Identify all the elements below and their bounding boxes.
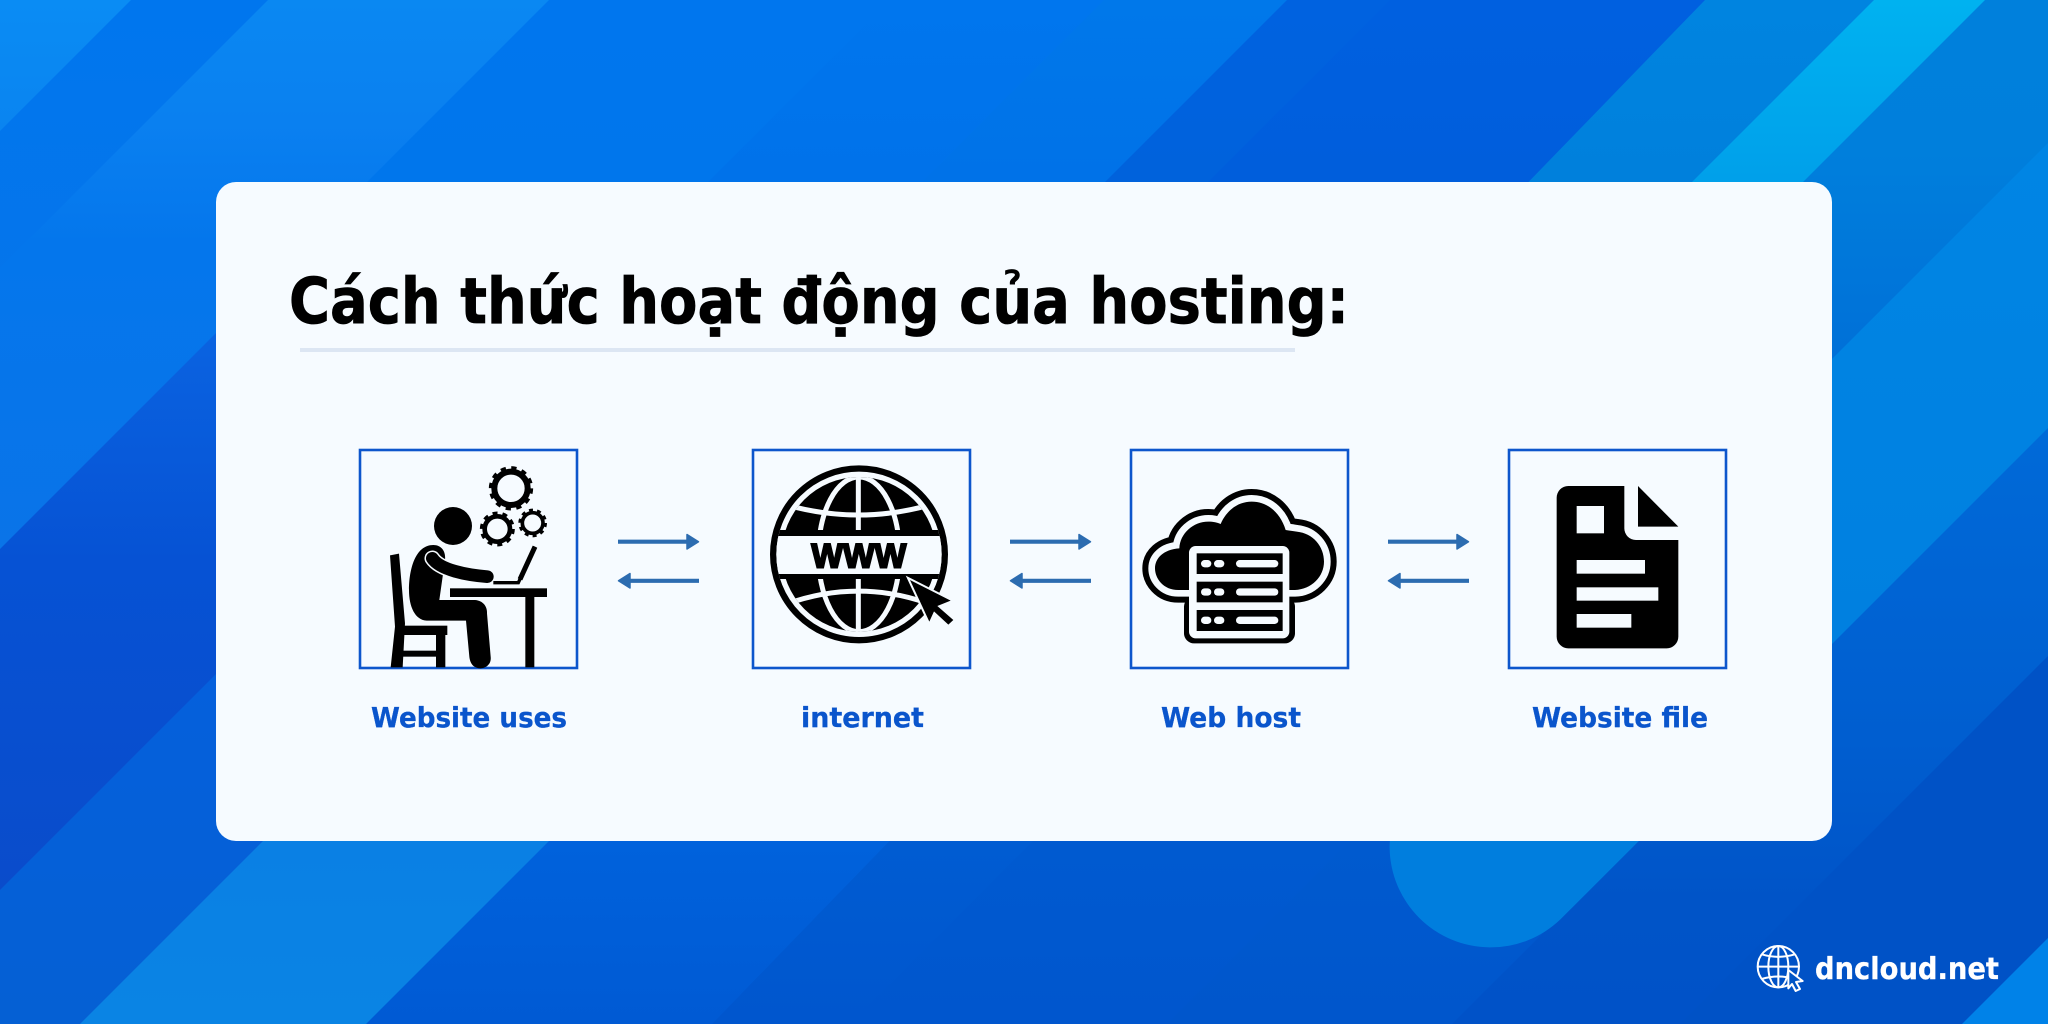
title: Cách thức hoạt động của hosting: xyxy=(289,265,1349,338)
step 3: web host xyxy=(1131,450,1348,734)
arrows 2 xyxy=(1010,534,1091,588)
box 3 xyxy=(1131,450,1348,668)
icon: www globe with cursor xyxy=(773,468,953,640)
arrows 1 xyxy=(618,534,699,588)
icon: document xyxy=(1557,486,1678,648)
icon: www globe with cursor: WWW xyxy=(811,537,907,575)
box 2 xyxy=(753,450,970,668)
label: web host: Web host xyxy=(1161,701,1301,734)
label: website uses: Website uses xyxy=(371,701,567,734)
logo text: dncloud.net xyxy=(1815,952,1999,987)
box 1 xyxy=(360,450,577,668)
box 4 xyxy=(1509,450,1726,668)
step 2: internet xyxy=(753,450,970,734)
label: website file: Website file xyxy=(1532,701,1708,734)
arrows 3 xyxy=(1388,534,1469,588)
icon: cloud server xyxy=(1155,502,1324,643)
step 4: website file xyxy=(1509,450,1726,734)
title underline xyxy=(300,348,1295,352)
icon: person at laptop with gears xyxy=(390,468,547,668)
logo: dncloud.net xyxy=(1758,946,1999,991)
step 1: website uses xyxy=(360,450,577,734)
icon: logo globe with cursor xyxy=(1758,946,1803,991)
label: internet: internet xyxy=(801,701,924,734)
panel: white card xyxy=(216,182,1832,841)
